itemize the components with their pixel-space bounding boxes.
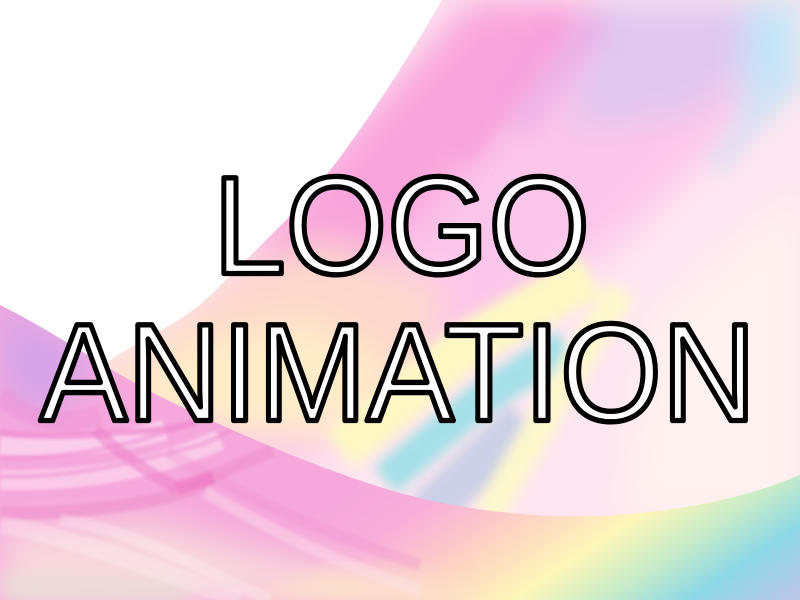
title: logo animation <box>40 148 756 450</box>
title line: LOGO: LOGO <box>213 148 590 303</box>
decorative streak arcs <box>0 395 420 600</box>
background: upper pastel swoosh <box>108 0 800 516</box>
background: lower pink and rainbow swoosh <box>0 305 800 600</box>
title line: ANIMATION: ANIMATION <box>40 295 756 450</box>
